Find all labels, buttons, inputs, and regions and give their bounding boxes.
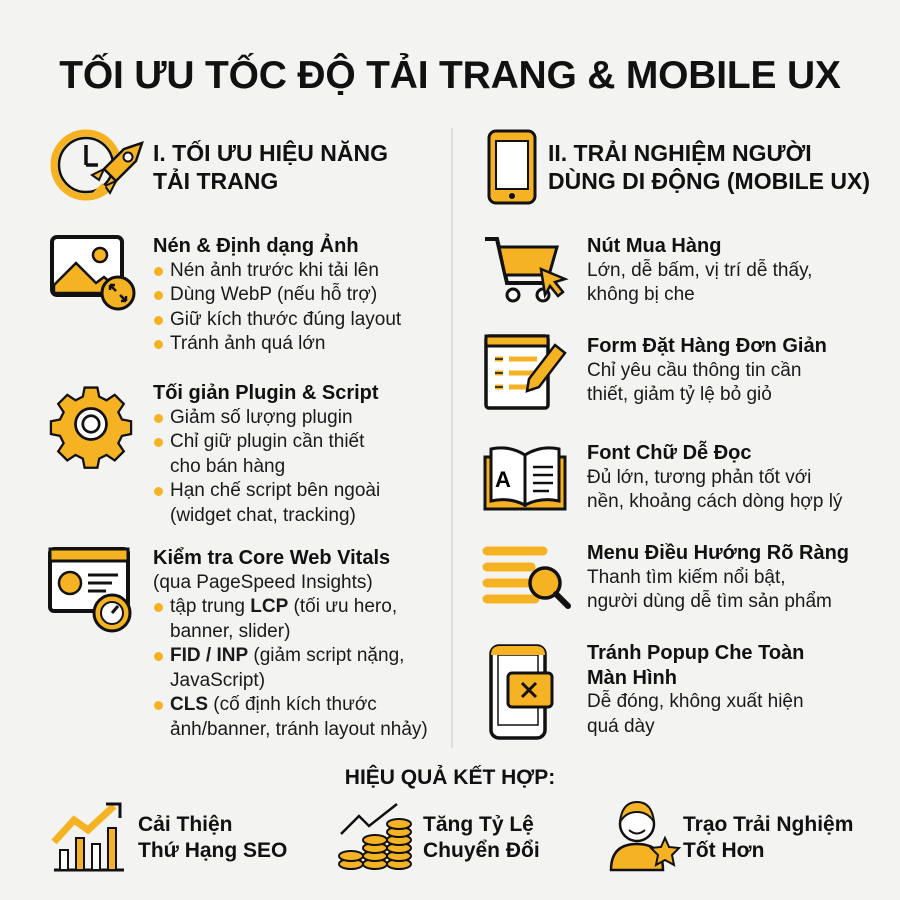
block: core web vitals: JavaScript) (170, 670, 265, 690)
icon: gear (50, 386, 132, 469)
icon: phone (488, 130, 536, 204)
block: core web vitals: banner, slider) (170, 620, 290, 642)
block: images: Nén ảnh trước khi tải lên (170, 260, 379, 280)
block: font (587, 440, 842, 512)
section heading I: I. TỐI ƯU HIỆU NĂNG (153, 140, 388, 166)
block: menu: Thanh tìm kiếm nổi bật, (587, 566, 786, 588)
block: buy button: Nút Mua Hàng (587, 235, 721, 257)
icon: book: A (495, 467, 511, 492)
text: seo: Thứ Hạng SEO (138, 839, 287, 862)
block: core web vitals (153, 547, 428, 740)
block: order form: Form Đặt Hàng Đơn Giản (587, 335, 827, 357)
block: plugins: cho bán hàng (170, 456, 285, 476)
text: conversion: Chuyển Đổi (423, 839, 540, 862)
text: experience: Tốt Hơn (683, 839, 764, 862)
block: core web vitals: CLS (cố định kích thước (170, 694, 377, 715)
block: core web vitals: ảnh/banner, tránh layout nhảy) (170, 718, 428, 740)
block: images (153, 234, 401, 354)
block: menu: người dùng dễ tìm sản phẩm (587, 591, 832, 612)
text: conversion (423, 813, 540, 862)
icon: image (50, 235, 136, 310)
block: popup: Tránh Popup Che Toàn (587, 642, 804, 664)
icon: dashboard gauge (48, 547, 132, 632)
block: order form: thiết, giảm tỷ lệ bỏ giỏ (587, 384, 772, 405)
block: order form (587, 335, 827, 405)
panel: results (52, 801, 853, 872)
block: images: Nén & Định dạng Ảnh (153, 235, 359, 257)
text: seo (138, 813, 287, 862)
divider (451, 128, 453, 748)
heading: combined effect: HIỆU QUẢ KẾT HỢP: (345, 766, 555, 789)
text: experience: Trạo Trải Nghiệm (683, 813, 853, 836)
panel: right mobile ux (482, 130, 870, 740)
block: core web vitals: (qua PageSpeed Insights) (153, 572, 373, 592)
block: buy button: không bị che (587, 284, 695, 305)
block: menu: Menu Điều Hướng Rõ Ràng (587, 542, 849, 564)
panel: left performance (48, 130, 428, 740)
block: plugins: Giảm số lượng plugin (170, 406, 353, 428)
block: menu (587, 542, 849, 612)
block: core web vitals: Kiểm tra Core Web Vitals (153, 547, 390, 569)
block: buy button: Lớn, dễ bấm, vị trí dễ thấy, (587, 260, 812, 280)
block: font: nền, khoảng cách dòng hợp lý (587, 491, 842, 512)
block: font: Đủ lớn, tương phản tốt với (587, 466, 811, 488)
icon: cart (485, 237, 569, 302)
block: plugins (153, 382, 380, 526)
icon: form (484, 334, 567, 410)
block: plugins: Chỉ giữ plugin cần thiết (170, 431, 364, 452)
title: TỐI ƯU TỐC ĐỘ TẢI TRANG & MOBILE UX (59, 54, 841, 97)
section heading II: DÙNG DI ĐỘNG (MOBILE UX) (548, 168, 870, 194)
block: images: Dùng WebP (nếu hỗ trợ) (170, 284, 377, 305)
block: images: Tránh ảnh quá lớn (170, 333, 325, 354)
icon: coins (338, 803, 412, 870)
icon: phone popup (489, 644, 554, 740)
block: core web vitals: FID / INP (giảm script nặng, (170, 645, 404, 666)
icon: clock rocket (50, 130, 144, 200)
block: buy button (587, 235, 812, 305)
block: popup: quá dày (587, 716, 655, 736)
block: order form: Chỉ yêu cầu thông tin cần (587, 360, 801, 380)
section heading II: II. TRẢI NGHIỆM NGƯỜI (548, 140, 812, 166)
section heading II (548, 140, 870, 194)
text: seo: Cải Thiện (138, 813, 233, 836)
block: popup (587, 642, 804, 736)
icon: chart up (52, 802, 124, 872)
icon: user star (610, 801, 682, 872)
section heading I (153, 140, 388, 194)
block: popup: Màn Hình (587, 666, 677, 688)
block: plugins: (widget chat, tracking) (170, 504, 356, 526)
block: images: Giữ kích thước đúng layout (170, 308, 401, 330)
block: plugins: Hạn chế script bên ngoài (170, 480, 380, 501)
block: core web vitals: tập trung LCP (tối ưu hero, (170, 596, 397, 617)
block: plugins: Tối giản Plugin & Script (153, 382, 379, 404)
block: popup: Dễ đóng, không xuất hiện (587, 691, 804, 712)
icon: book (484, 446, 566, 510)
block: font: Font Chữ Dễ Đọc (587, 442, 751, 464)
text: conversion: Tăng Tỷ Lệ (423, 813, 534, 836)
section heading I: TẢI TRANG (153, 168, 278, 194)
text: experience (683, 813, 853, 862)
icon: menu search (482, 546, 571, 609)
